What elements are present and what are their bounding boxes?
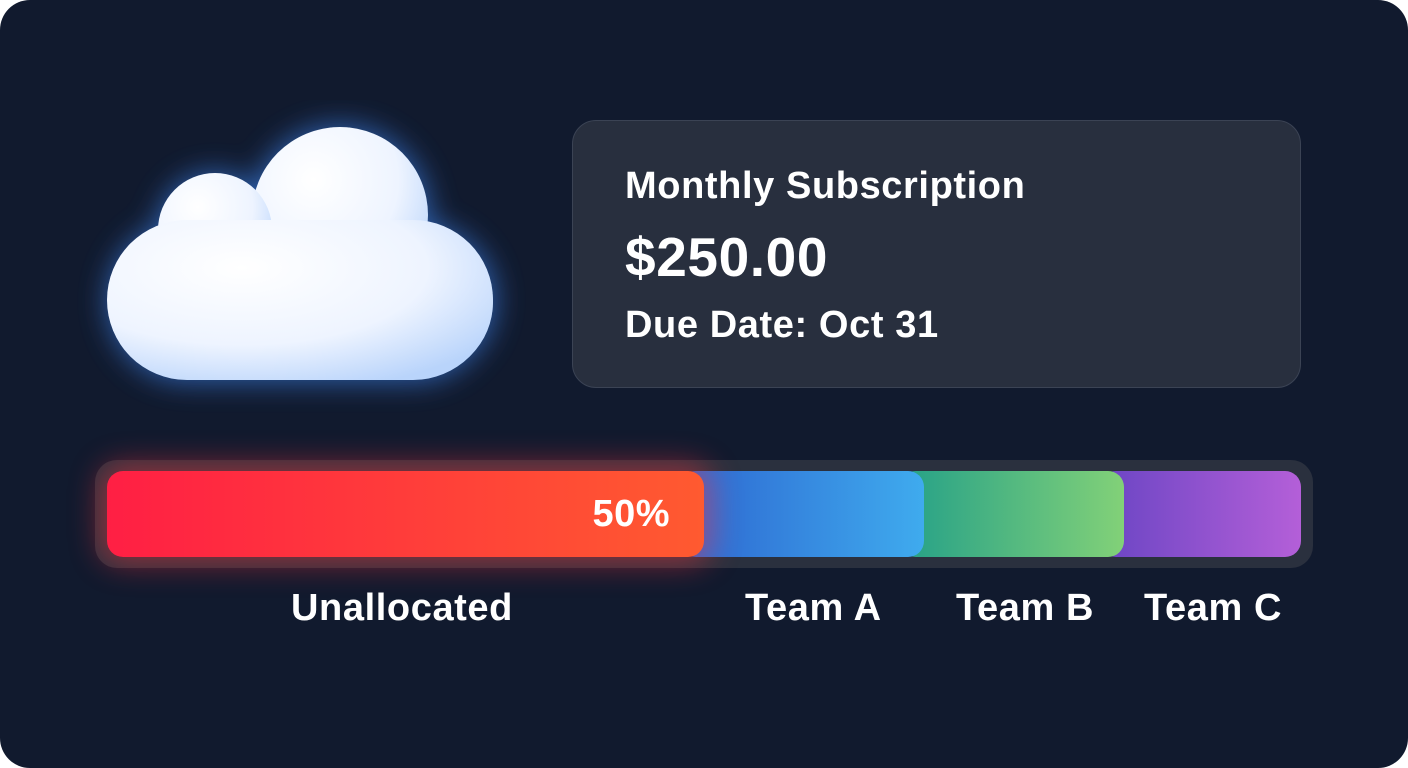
- segment: Unallocated 50%: 50%: [592, 493, 670, 535]
- label: Team A: Team A: [745, 587, 882, 629]
- label: Team C: Team C: [1144, 587, 1282, 629]
- segment: Team A: [680, 471, 924, 557]
- label: Unallocated: Unallocated: [291, 587, 513, 629]
- segment: Team B: [900, 471, 1124, 557]
- label: Team B: Team B: [956, 587, 1094, 629]
- icon: cloud: [88, 106, 515, 402]
- panel: subscription card: [572, 120, 1301, 388]
- heading: Monthly Subscription: Monthly Subscription: [625, 165, 1025, 207]
- segment: Team C: [1100, 471, 1301, 557]
- amount: $250.00: [625, 226, 828, 288]
- segment: Unallocated 50%: [107, 471, 704, 557]
- due date: Due Date: Oct 31: [625, 304, 939, 346]
